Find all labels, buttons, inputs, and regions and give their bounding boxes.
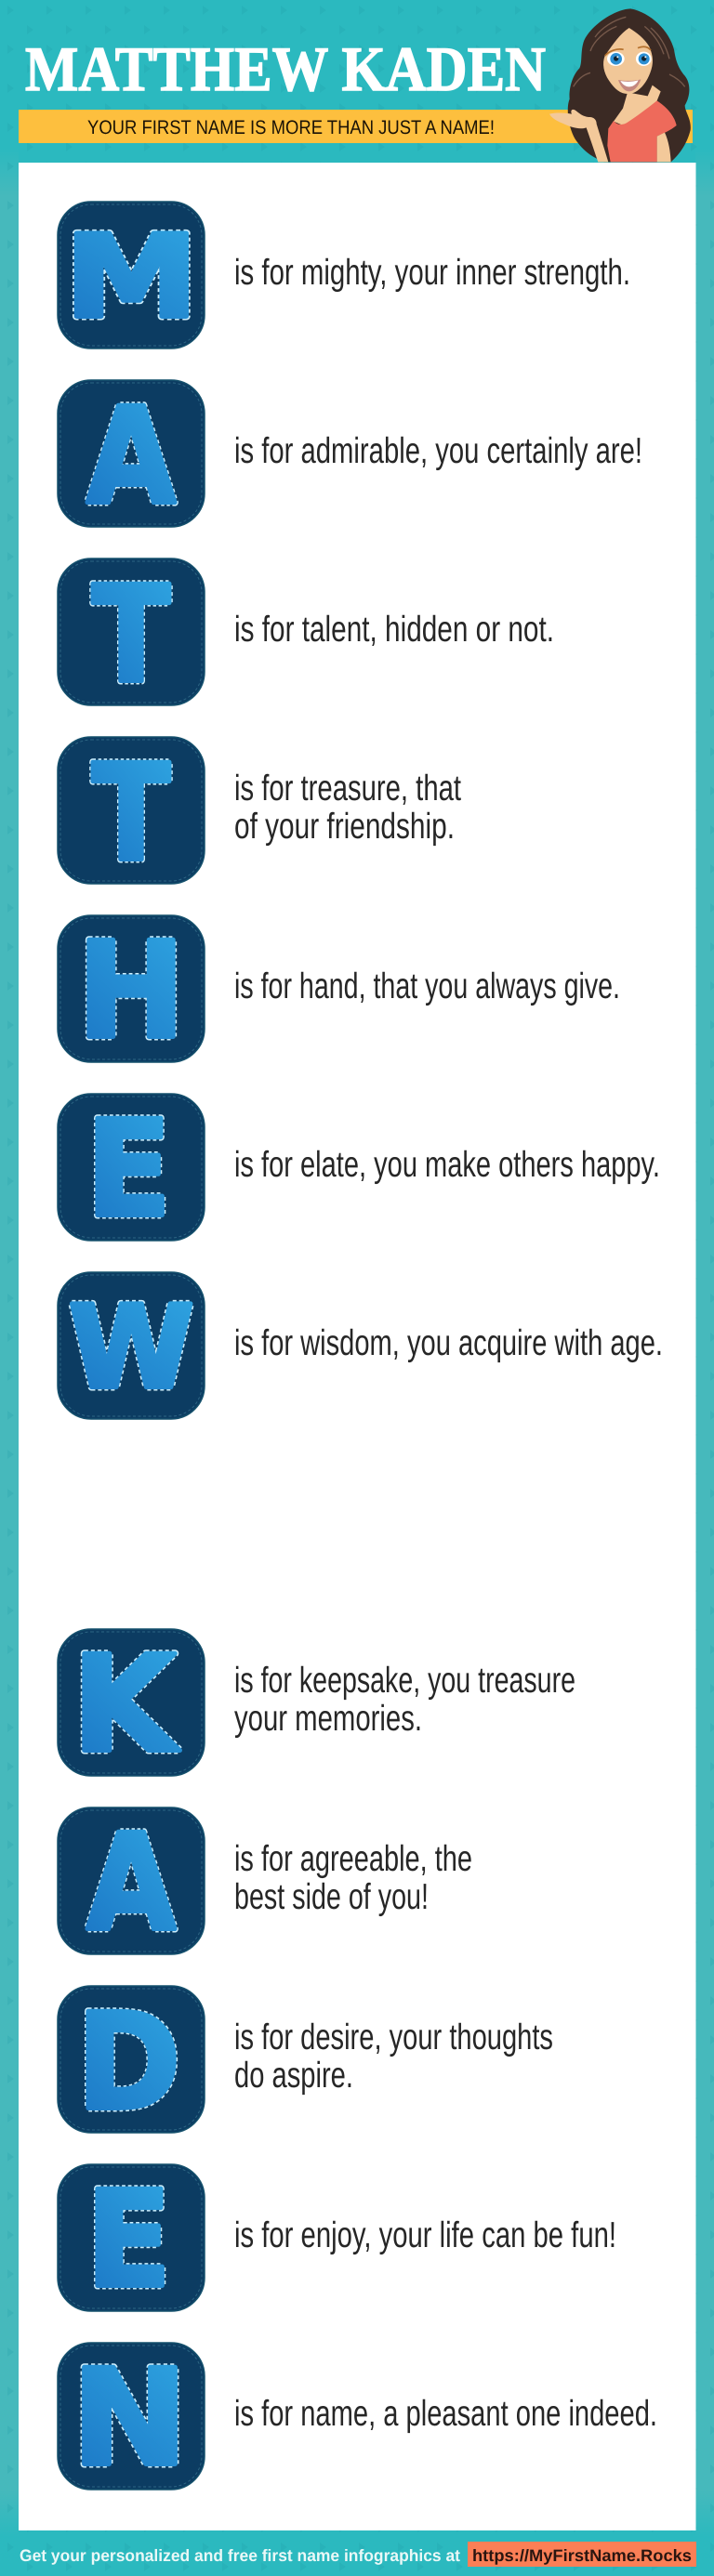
row A: tile and two-line text: [58, 1805, 472, 1961]
row M: tile and text: M: [64, 212, 198, 344]
row N: tile and text: N: [72, 2340, 188, 2496]
row T: tile and text: [58, 558, 554, 712]
row D: tile and two-line text: do aspire.: [234, 2056, 353, 2096]
row E: tile and text: E: [86, 1091, 171, 1247]
title: MATTHEW KADEN: [25, 33, 546, 104]
row T: tile and two-line text: [58, 736, 461, 890]
row D: tile and two-line text: [58, 1985, 553, 2139]
row T: tile and two-line text: T: [92, 736, 170, 890]
row H: tile and text: [58, 913, 620, 1069]
row K: tile and two-line text: K: [73, 1626, 180, 1782]
row K: tile and two-line text: K: [73, 1626, 180, 1782]
row A: tile and text: [58, 379, 642, 533]
row D: tile and two-line text: D: [76, 1985, 180, 2139]
row M: tile and text: [58, 202, 630, 348]
row H: tile and text: H: [77, 913, 185, 1069]
row A: tile and two-line text: A: [86, 1805, 176, 1961]
footer text: Get your personalized and free first name infographics at: [20, 2546, 460, 2565]
row N: tile and text: N: [72, 2340, 188, 2496]
footer url badge: https://MyFirstName.Rocks: [472, 2546, 692, 2565]
row D: tile and two-line text: is for desire, your thoughts: [234, 2017, 553, 2057]
row A: tile and two-line text: A: [86, 1805, 176, 1961]
row H: tile and text: H: [77, 913, 185, 1069]
subtitle banner: [19, 110, 693, 143]
footer url badge: [468, 2542, 696, 2567]
row A: tile and text: A: [86, 379, 176, 533]
row A: tile and two-line text: best side of you!: [234, 1877, 429, 1917]
row E: tile and text: E: [86, 1091, 171, 1247]
row A: tile and two-line text: is for agreeable, the: [234, 1839, 472, 1879]
illustration: cartoon woman presenting: [549, 8, 691, 162]
row T: tile and text: T: [92, 558, 170, 712]
row E: tile and text: [58, 2162, 616, 2318]
subtitle banner: YOUR FIRST NAME IS MORE THAN JUST A NAME!: [87, 117, 495, 138]
row T: tile and two-line text: is for treasure, that: [234, 769, 461, 808]
row W: tile and text: W: [69, 1282, 194, 1414]
row T: tile and two-line text: of your friendship.: [234, 807, 455, 847]
row E: tile and text: [58, 1091, 660, 1247]
row K: tile and two-line text: is for keepsake, you treasure: [234, 1661, 575, 1701]
row T: tile and text: T: [92, 558, 170, 712]
row D: tile and two-line text: D: [76, 1985, 180, 2139]
row K: tile and two-line text: [58, 1626, 575, 1782]
row E: tile and text: E: [86, 2162, 171, 2318]
row M: tile and text: M: [64, 212, 198, 344]
row W: tile and text: [58, 1272, 663, 1419]
row N: tile and text: [58, 2340, 657, 2496]
row T: tile and two-line text: T: [92, 736, 170, 890]
row W: tile and text: W: [69, 1282, 194, 1414]
row K: tile and two-line text: your memories.: [234, 1699, 422, 1739]
row T: tile and text: is for talent, hidden or not.: [234, 610, 554, 650]
row A: tile and text: A: [86, 379, 176, 533]
row E: tile and text: E: [86, 2162, 171, 2318]
